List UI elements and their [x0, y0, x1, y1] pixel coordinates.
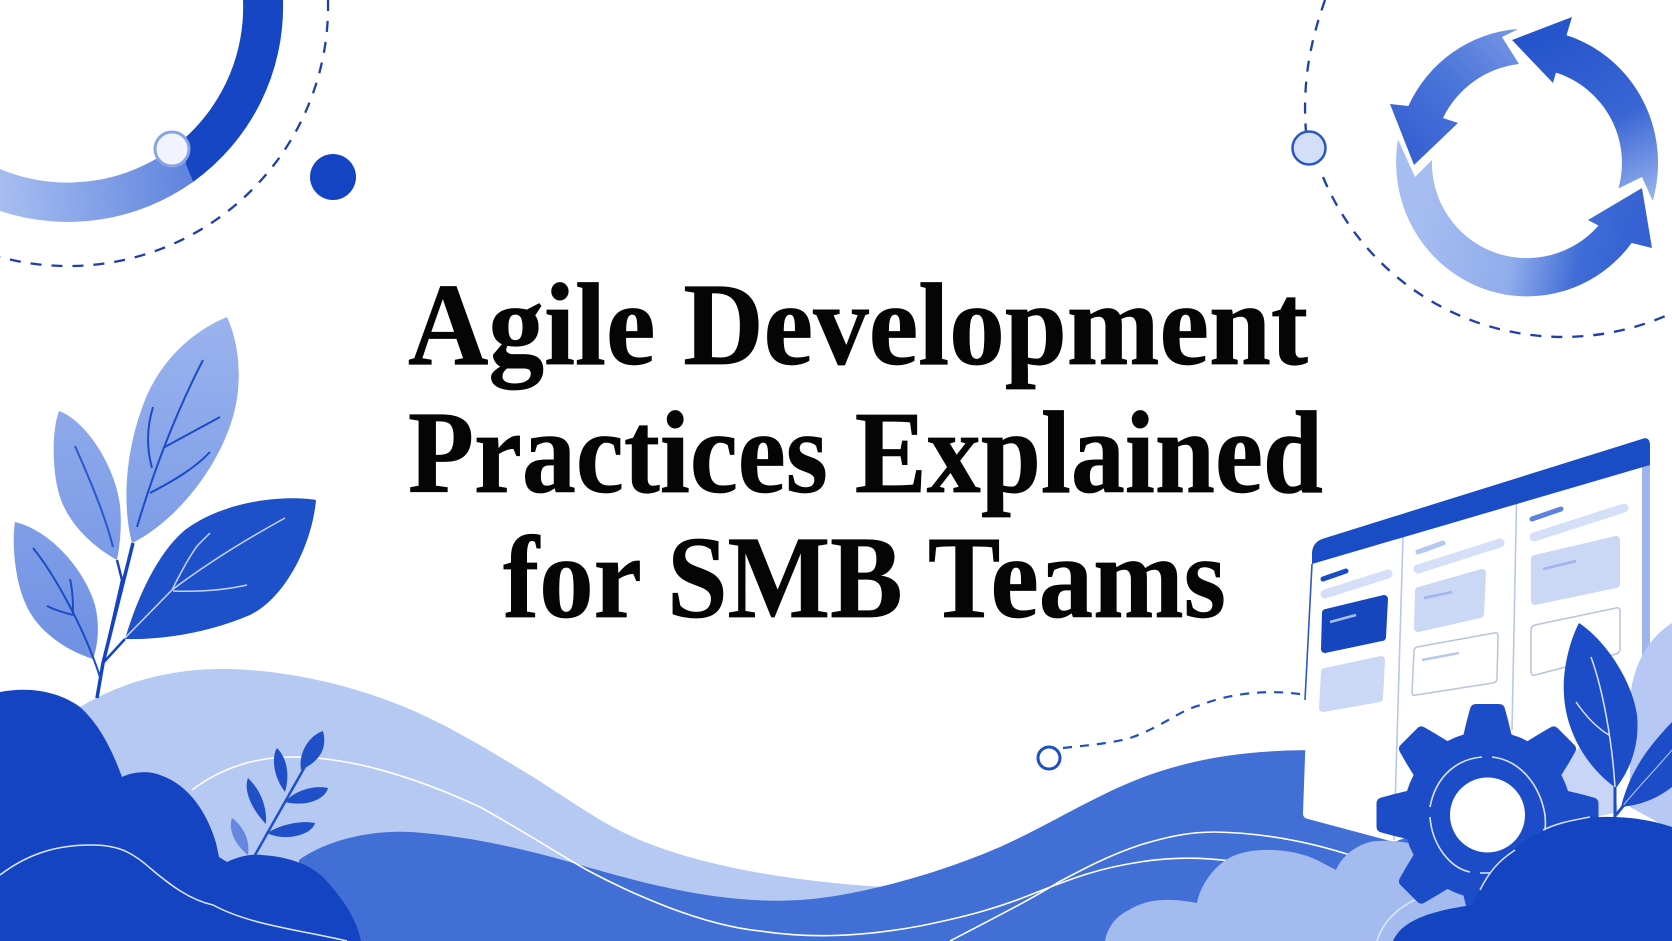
card outline	[1412, 633, 1498, 695]
landscape wave: medium	[299, 750, 1440, 941]
dashed orbit lower arc	[1323, 177, 1672, 337]
gear hub ring	[1430, 757, 1545, 873]
column 1	[1323, 571, 1388, 708]
top-right cycle arrows graphic	[1292, 0, 1672, 337]
light patch behind plant	[1555, 730, 1618, 825]
sprig stem	[255, 763, 307, 855]
small sprig	[231, 731, 328, 855]
solid blue dot	[310, 154, 356, 200]
ring: dark arc	[186, 0, 283, 182]
board body	[1303, 460, 1650, 842]
light cloud, right	[1630, 623, 1672, 830]
plant stem	[1615, 785, 1624, 820]
landscape wave: light	[80, 669, 883, 941]
connector node	[1038, 747, 1060, 769]
leaf: right dark	[125, 498, 316, 639]
cycle arrow: right	[1512, 17, 1658, 201]
sprig leaves	[231, 731, 328, 855]
cloud contour arc	[1377, 892, 1441, 941]
top-left ring graphic	[0, 0, 356, 266]
card light	[1418, 573, 1482, 628]
bush contour	[1480, 817, 1590, 890]
title line 3: for SMB Teams	[503, 512, 1226, 643]
orbit node	[1292, 132, 1326, 164]
white contour on bush	[0, 845, 347, 941]
leaf: tall	[1564, 623, 1638, 788]
ring: gradient arc	[0, 137, 193, 222]
card dark	[1325, 599, 1384, 649]
board left edge	[1305, 564, 1312, 700]
gear icon	[1376, 704, 1598, 926]
column 2	[1412, 543, 1500, 695]
title line 1: Agile Development	[408, 259, 1308, 390]
gear body	[1404, 731, 1572, 899]
big plant, left	[14, 317, 316, 698]
card light	[1323, 660, 1381, 708]
leaf: middle left	[54, 411, 121, 560]
column 3	[1531, 508, 1624, 675]
light cloud, bottom	[1105, 841, 1510, 941]
kanban board	[1303, 438, 1650, 842]
gear hole	[1450, 778, 1525, 852]
gear teeth	[1376, 704, 1598, 926]
plant, right	[1564, 623, 1672, 820]
dark bush, left	[0, 690, 361, 941]
dark bush, right	[1393, 817, 1672, 941]
dashed connector	[1038, 692, 1306, 769]
card outline	[1531, 608, 1620, 675]
column dividers	[1394, 503, 1516, 840]
white contour lines	[192, 757, 1356, 941]
dashed orbit top-right	[1305, 0, 1325, 132]
leaf: top	[126, 317, 239, 543]
ring: node	[155, 132, 189, 166]
leaf: lower left	[14, 522, 100, 677]
card light	[1535, 540, 1616, 601]
plant stem	[97, 543, 133, 698]
board right edge	[1642, 462, 1650, 660]
title line 2: Practices Explained	[408, 387, 1323, 518]
cycle arrow: left	[1390, 29, 1519, 165]
leaf: far right	[1621, 722, 1672, 808]
board header	[1312, 438, 1650, 564]
title	[408, 259, 1323, 643]
cycle arrow: bottom	[1396, 140, 1652, 296]
dashed orbit top-left	[0, 0, 328, 266]
